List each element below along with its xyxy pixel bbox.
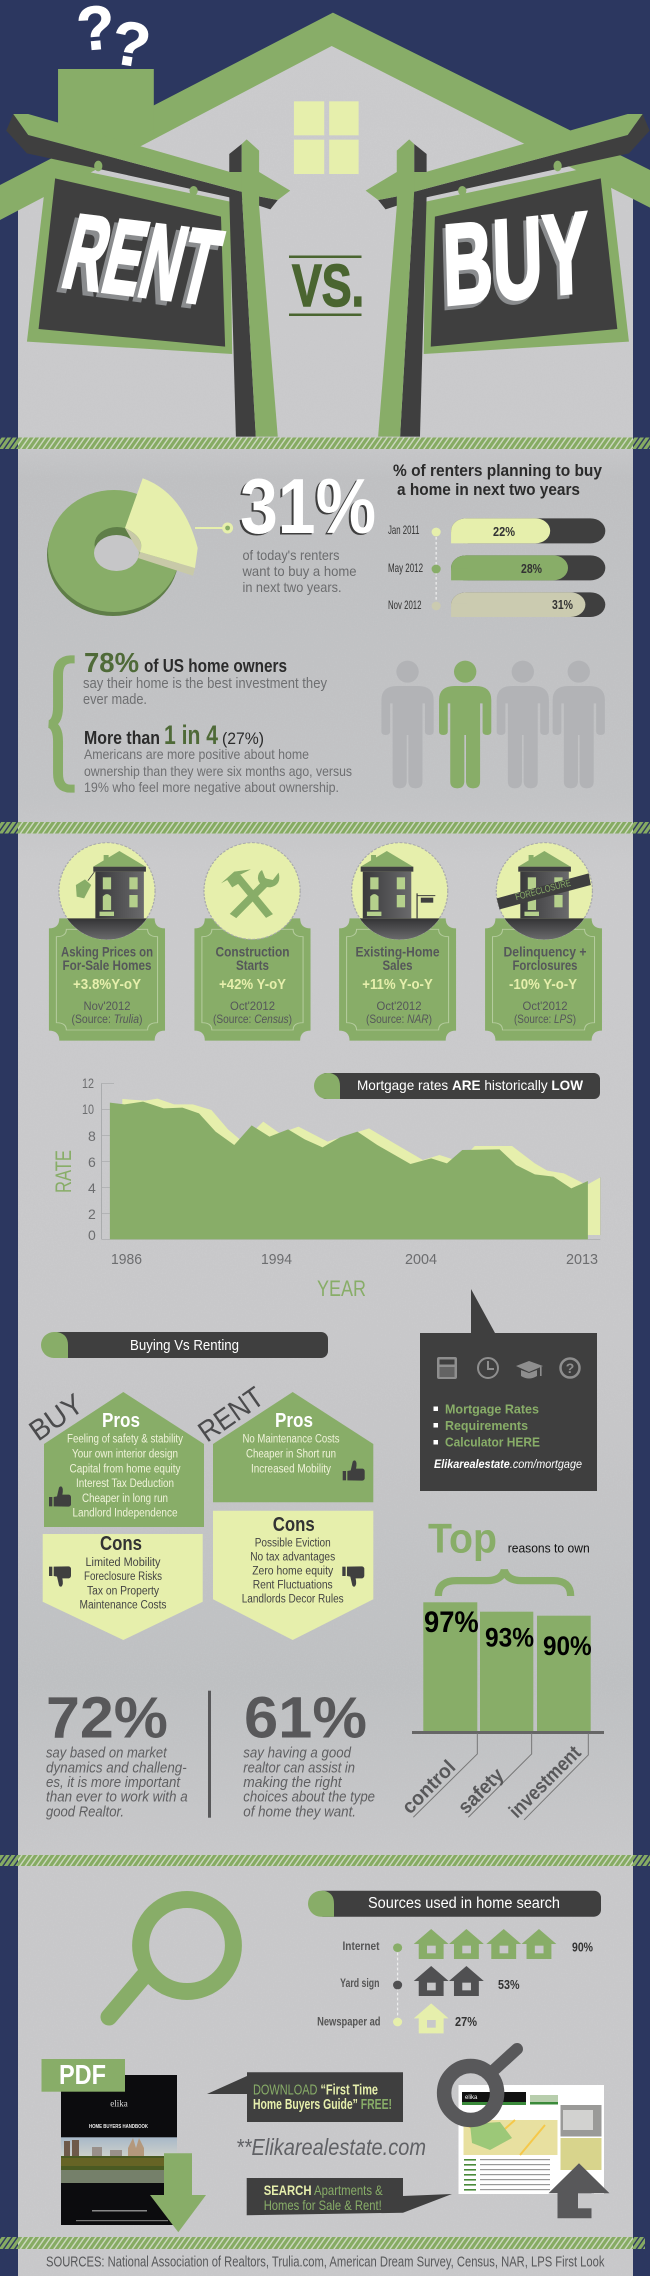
- badge: construction: (Source: Census): [213, 1012, 292, 1026]
- area chart: [102, 1083, 600, 1239]
- rent pros list: No Maintenance Costs: [242, 1434, 340, 1446]
- progress bars: [432, 518, 605, 617]
- download callout: [207, 2072, 403, 2122]
- buy pros list: Feeling of safety & stability: [67, 1434, 183, 1446]
- stat 61%: choices about the type: [243, 1789, 375, 1806]
- 78% statement: ever made.: [83, 692, 147, 708]
- bar labels and values: 22%: [493, 524, 515, 539]
- divider line: [208, 1691, 211, 1818]
- icon: calculator: [437, 1357, 457, 1379]
- badge: existing home sales: +11% Y-o-Y: [362, 976, 433, 993]
- badge: existing home sales: Oct'2012: [376, 999, 422, 1013]
- pictogram labels: Yard sign: [340, 1976, 380, 1990]
- badge: existing home sales: Sales: [382, 957, 413, 973]
- icon: thumbs up: [343, 1460, 365, 1481]
- pill heading: mortgage rates: Mortgage rates ARE historically LOW: [357, 1077, 584, 1093]
- bar labels and values: Jan 2011: [388, 523, 420, 537]
- badge: asking prices: +3.8%Y-oY: [73, 976, 141, 993]
- download callout: DOWNLOAD “First Time: [253, 2082, 378, 2098]
- 31% caption: want to buy a home: [242, 563, 357, 579]
- panel: mortgage rate chart: [51, 1073, 600, 1301]
- icon: foreclosed house: [497, 851, 591, 918]
- icon: clock: [478, 1358, 498, 1378]
- badge shapes and icons: [49, 843, 602, 1041]
- badge: delinquency: [504, 944, 586, 1026]
- x axis labels: [111, 1251, 598, 1268]
- bars heading: [393, 461, 602, 499]
- y axis labels: 6: [88, 1154, 96, 1170]
- pill heading: buying vs renting: [41, 1332, 328, 1358]
- buy pros list: Landlord Independence: [72, 1508, 178, 1520]
- Top heading: Top: [428, 1515, 497, 1562]
- badge: asking prices: [61, 944, 153, 1026]
- foreclosure banner text: FORECLOSURE: [514, 878, 572, 903]
- rent cons list: Zero home equity: [252, 1565, 333, 1577]
- stat 72%: than ever to work with a: [46, 1789, 188, 1806]
- panel: sources used in home search: [109, 1891, 601, 2033]
- buy pros list: [67, 1410, 183, 1520]
- 78% statement: say their home is the best investment they: [83, 676, 328, 692]
- panel: renters planning to buy: [47, 461, 605, 617]
- bar chart: 97%: [424, 1606, 479, 1639]
- badge: asking prices: For-Sale Homes: [62, 957, 152, 973]
- stat 61%: [243, 1686, 375, 1820]
- PDF handbook cover: HOME BUYERS HANDBOOK: [89, 2124, 148, 2130]
- x axis labels: 1994: [261, 1251, 292, 1268]
- pictogram rows: [393, 1929, 556, 2033]
- panel: realtor stats: [46, 1686, 375, 1820]
- badge: asking prices: Asking Prices on: [61, 944, 153, 960]
- bar labels: safety: [454, 1763, 509, 1819]
- buy cons list: Maintenance Costs: [80, 1599, 167, 1611]
- 78% statement: [83, 647, 328, 708]
- stat 61%: realtor can assist in: [243, 1759, 355, 1776]
- badge: existing home sales: Existing-Home: [356, 944, 440, 960]
- pictogram values: 27%: [455, 2014, 477, 2029]
- PDF tag: PDF: [59, 2059, 106, 2090]
- search callout: Homes for Sale & Rent!: [264, 2197, 382, 2213]
- pill heading: mortgage rates: [314, 1073, 600, 1099]
- RENT sign text: RENT: [48, 197, 226, 331]
- pill heading: sources: Sources used in home search: [368, 1895, 560, 1912]
- 1 in 4 statement: Americans are more positive about home: [84, 746, 309, 762]
- rent cons list: Cons: [273, 1514, 315, 1536]
- stat 61%: of home they want.: [243, 1803, 356, 1820]
- download callout: Home Buyers Guide” FREE!: [253, 2097, 392, 2113]
- icon: gray magnifying glass: [444, 2049, 517, 2120]
- buy pros list: Interest Tax Deduction: [76, 1478, 174, 1490]
- question marks: ?: [107, 8, 155, 82]
- PDF tag: [42, 2059, 125, 2092]
- 1 in 4 statement: (27%): [222, 729, 264, 748]
- bar chart: [412, 1602, 604, 1734]
- pictogram values: 53%: [498, 1977, 520, 1992]
- bars heading: % of renters planning to buy: [393, 461, 602, 480]
- badge: existing home sales: (Source: NAR): [366, 1012, 432, 1026]
- icon: gray house: [548, 2163, 610, 2218]
- 1 in 4 statement: 19% who feel more negative about ownership.: [84, 779, 339, 795]
- x axis labels: 2013: [566, 1251, 598, 1268]
- icon: thumbs up: [49, 1486, 71, 1507]
- y axis labels: 2: [88, 1206, 96, 1222]
- buy pros list: Cheaper in long run: [82, 1493, 168, 1505]
- badge: construction: +42% Y-oY: [219, 976, 286, 993]
- buy cons list: Cons: [100, 1533, 142, 1555]
- leader lines: [413, 1733, 588, 1820]
- y axis labels: 12: [82, 1075, 94, 1091]
- panel: mortgage callout: [420, 1289, 597, 1491]
- badge: construction: [213, 944, 292, 1026]
- bar labels and values: 28%: [521, 561, 542, 576]
- callout url: Elikarealestate.com/mortgage: [434, 1459, 582, 1471]
- y axis labels: 4: [88, 1180, 96, 1196]
- left sign post: [6, 114, 290, 437]
- icon: magnifying glass: [109, 1900, 233, 2017]
- stat 72%: good Realtor.: [46, 1803, 124, 1820]
- pill heading: buying vs renting: Buying Vs Renting: [130, 1337, 239, 1354]
- house roof and chimney: [0, 13, 650, 220]
- download arrow: [150, 2153, 206, 2232]
- striped divider 1: [0, 438, 650, 449]
- icon: thumbs down: [342, 1566, 364, 1587]
- y axis labels: 8: [88, 1128, 96, 1144]
- icon: house with sale sign: [361, 851, 435, 918]
- 1 in 4 statement: 1 in 4: [164, 720, 218, 750]
- buy pros list: Pros: [102, 1410, 140, 1432]
- axis title YEAR: YEAR: [317, 1276, 366, 1301]
- BUY label: BUY: [24, 1388, 90, 1448]
- badge: delinquency: (Source: LPS): [514, 1012, 576, 1026]
- pictogram labels: Internet: [342, 1939, 380, 1953]
- big 31%: 31%: [240, 462, 376, 550]
- stat 72%: es, it is more important: [46, 1774, 181, 1791]
- bar chart: 90%: [543, 1631, 592, 1661]
- rent cons list: Rent Fluctuations: [253, 1579, 333, 1591]
- site name: **Elikarealestate.com: [236, 2134, 426, 2160]
- striped divider 4: [0, 2237, 645, 2249]
- panel: top reasons to own: [398, 1515, 604, 1823]
- icon: graduation cap: [516, 1361, 543, 1378]
- pill heading: sources: [308, 1891, 601, 1917]
- website screenshot: elika: [465, 2095, 478, 2101]
- pictogram labels: Newspaper ad: [317, 2015, 380, 2029]
- bars heading: a home in next two years: [397, 480, 580, 499]
- panel: download guide and search: [42, 2049, 610, 2232]
- bar labels: investment: [505, 1742, 586, 1823]
- PDF handbook cover: elika: [110, 2099, 128, 2109]
- bar labels and values: [388, 523, 573, 612]
- rent cons list: Possible Eviction: [255, 1538, 331, 1550]
- RENT sign text: RENT: [53, 193, 231, 327]
- badge: delinquency: Delinquency +: [504, 944, 586, 960]
- BUY sign text: [438, 189, 590, 334]
- stat 72%: 72%: [46, 1686, 168, 1751]
- rent pros list: Pros: [275, 1410, 313, 1432]
- icon: question mark: ?: [566, 1360, 574, 1376]
- curly brace: [438, 1570, 571, 1596]
- badge: delinquency: -10% Y-o-Y: [509, 976, 577, 993]
- 31% caption: in next two years.: [242, 579, 342, 595]
- cons house shape: [213, 1511, 373, 1640]
- badge: construction: Oct'2012: [230, 999, 275, 1013]
- attic window: [294, 101, 359, 174]
- panel: buy cons: [43, 1533, 203, 1640]
- reasons to own: reasons to own: [508, 1541, 590, 1556]
- badge: delinquency: Oct'2012: [522, 999, 568, 1013]
- buy cons list: Limited Mobility: [86, 1557, 161, 1569]
- badge: delinquency: Forclosures: [512, 957, 578, 973]
- buy cons list: [80, 1533, 167, 1611]
- buy pros list: Your own interior design: [72, 1448, 178, 1460]
- bar labels and values: 31%: [552, 597, 573, 612]
- pros house shape: [213, 1392, 373, 1502]
- panel: market badges: [49, 843, 602, 1041]
- pros house shape: [44, 1392, 204, 1527]
- question marks: [74, 0, 155, 82]
- 31% caption: [242, 547, 357, 595]
- x axis labels: 2004: [405, 1251, 437, 1268]
- callout list: Mortgage Rates: [445, 1401, 539, 1416]
- rent cons list: Landlords Decor Rules: [242, 1593, 344, 1605]
- icon: question mark: [560, 1358, 580, 1378]
- stat 72%: [46, 1686, 188, 1820]
- 1 in 4 statement: [84, 720, 352, 795]
- icon: thumbs down: [49, 1566, 71, 1587]
- badge: existing home sales: [356, 944, 440, 1026]
- striped divider 2: [0, 822, 650, 834]
- RENT label: RENT: [193, 1381, 270, 1449]
- rent cons list: No tax advantages: [250, 1552, 335, 1564]
- stat 61%: making the right: [243, 1774, 342, 1791]
- rent pros list: Cheaper in Short run: [246, 1448, 336, 1460]
- buy pros list: Capital from home equity: [70, 1463, 181, 1475]
- panel: rent cons: [213, 1511, 373, 1640]
- buy cons list: Tax on Property: [87, 1585, 159, 1597]
- website screenshot: [458, 2085, 604, 2194]
- bar labels and values: May 2012: [388, 561, 423, 575]
- pictogram values: 90%: [572, 1940, 593, 1955]
- callout list: [434, 1401, 540, 1450]
- search callout: [247, 2178, 452, 2215]
- PDF handbook cover: [61, 2075, 177, 2225]
- icon: price tag house: [76, 851, 146, 918]
- header house illustration: [0, 0, 650, 437]
- callout box: [420, 1289, 597, 1491]
- 1 in 4 statement: ownership than they were six months ago, versus: [84, 763, 352, 779]
- search callout: SEARCH Apartments &: [264, 2182, 383, 2198]
- callout list: Requirements: [445, 1418, 528, 1433]
- right sign post: [366, 114, 650, 437]
- callout list: Calculator HERE: [445, 1435, 540, 1450]
- striped divider 3: [0, 1855, 650, 1866]
- x axis labels: 1986: [111, 1251, 142, 1268]
- y axis labels: 0: [88, 1227, 96, 1243]
- bar labels: [398, 1742, 586, 1823]
- panel: home owners facts: [50, 647, 605, 795]
- cons house shape: [43, 1534, 203, 1640]
- panel: rent pros: [193, 1381, 373, 1502]
- 31% caption: of today's renters: [242, 547, 340, 563]
- stat 61%: 61%: [244, 1686, 367, 1751]
- stat 61%: say having a good: [243, 1745, 352, 1762]
- stat 72%: dynamics and challeng-: [46, 1759, 187, 1776]
- 1 in 4 statement: More than: [84, 728, 160, 748]
- RENT sign text: [48, 193, 231, 331]
- panel: buy pros: [24, 1388, 204, 1527]
- rent pros list: [242, 1410, 340, 1475]
- y axis labels: [82, 1075, 96, 1243]
- rent pros list: Increased Mobility: [251, 1463, 331, 1475]
- axis title RATE: RATE: [51, 1150, 76, 1193]
- VS. label: VS.: [292, 253, 364, 319]
- 78% statement: 78%: [84, 647, 139, 678]
- badge: asking prices: (Source: Trulia): [72, 1012, 143, 1026]
- rent cons list: [242, 1514, 344, 1605]
- badge: construction: Construction: [216, 944, 290, 960]
- icon: hammer and wrench: [221, 869, 279, 916]
- bar chart: 93%: [485, 1623, 534, 1653]
- badge: asking prices: Nov'2012: [84, 999, 131, 1013]
- donut chart 31%: [47, 478, 233, 616]
- pictogram labels: [317, 1939, 380, 2029]
- y axis labels: 10: [82, 1101, 94, 1117]
- stat 72%: say based on market: [46, 1745, 167, 1762]
- 78% statement: of US home owners: [144, 656, 287, 676]
- people icons: [381, 661, 605, 788]
- bar labels: control: [398, 1756, 460, 1819]
- big 31%: 31%: [238, 464, 374, 552]
- bar labels and values: Nov 2012: [388, 598, 422, 612]
- pictogram values: [455, 1940, 593, 2029]
- curly bracket: [50, 659, 75, 789]
- badge: construction: Starts: [236, 957, 269, 973]
- buy cons list: Foreclosure Risks: [84, 1571, 162, 1583]
